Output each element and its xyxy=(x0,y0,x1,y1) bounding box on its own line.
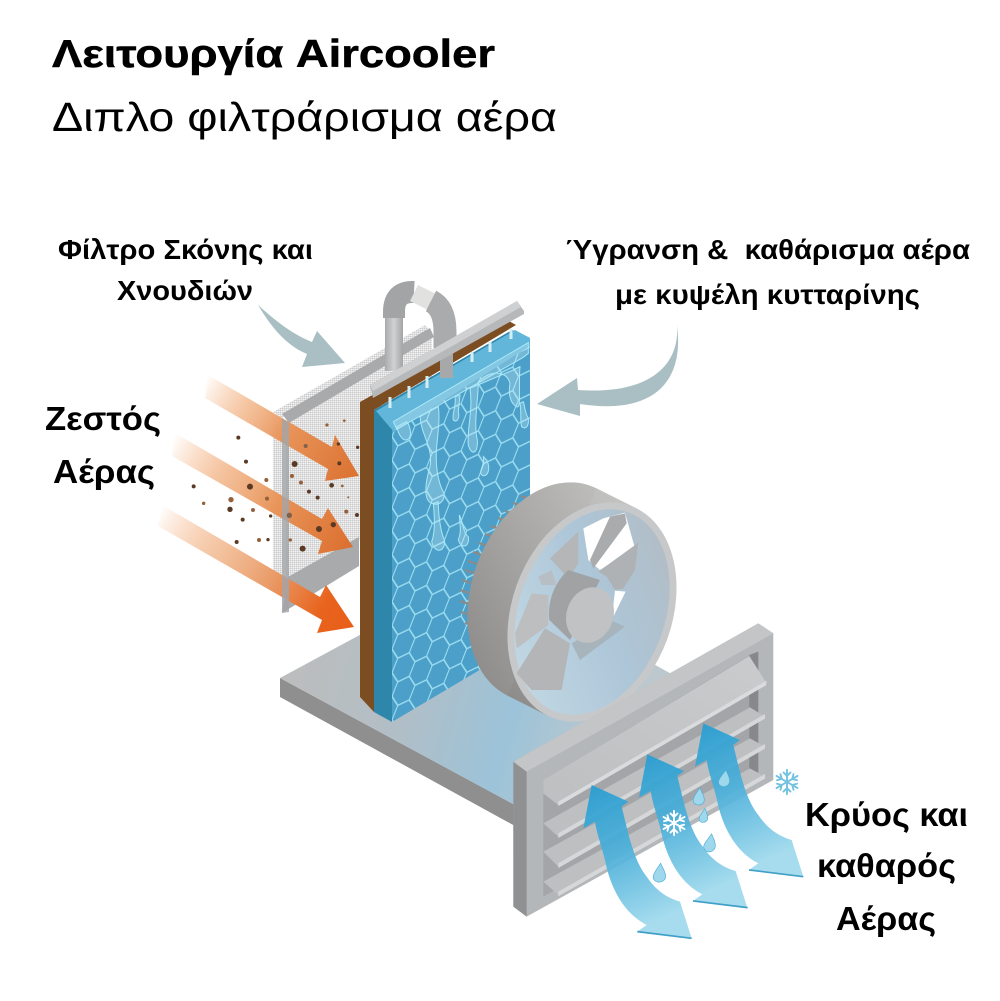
arrow C xyxy=(695,723,803,877)
water manifold with nozzles xyxy=(370,301,524,408)
arrow 2 xyxy=(172,433,353,554)
water pipe xyxy=(385,292,453,378)
cold air arrows xyxy=(583,723,803,938)
dust filter screen xyxy=(273,325,434,613)
label: dust filter: Χνουδιών xyxy=(117,275,253,306)
label: cold clean air: Κρύος και xyxy=(805,796,968,833)
fan inner xyxy=(487,487,697,737)
louvre grille xyxy=(513,623,773,917)
white gaps xyxy=(583,513,635,570)
pointer arrow to pad xyxy=(537,325,678,416)
arrow B xyxy=(639,754,747,908)
arrow 1 xyxy=(205,375,359,481)
label: humidification xyxy=(565,234,970,310)
label: dust filter xyxy=(58,234,313,306)
fan drum xyxy=(438,458,666,726)
base plate xyxy=(280,569,740,826)
snowflake icon white xyxy=(662,811,686,835)
label: cold clean air: καθαρός xyxy=(817,847,956,884)
fan hub xyxy=(549,570,600,640)
hot air arrows xyxy=(158,375,359,633)
label: humidification: Ύγρανση & καθάρισμα αέρα xyxy=(565,234,970,265)
slats xyxy=(543,656,767,805)
label: hot air: Αέρας xyxy=(53,453,155,490)
evaporative cooling pad xyxy=(360,320,530,722)
snowflake icon blue xyxy=(775,770,799,794)
label: hot air xyxy=(45,400,161,490)
fan xyxy=(438,458,706,746)
fan blades xyxy=(515,513,638,690)
label: hot air: Ζεστός xyxy=(45,400,161,437)
fan back fins xyxy=(460,496,530,626)
pointer arrow to filter xyxy=(258,305,345,367)
label: cold clean air xyxy=(805,796,968,937)
arrow A xyxy=(583,785,692,938)
label: humidification: με κυψέλη κυτταρίνης xyxy=(615,279,920,310)
fan rim xyxy=(478,478,706,746)
dust particles xyxy=(192,419,359,552)
label: dust filter: Φίλτρο Σκόνης και xyxy=(58,234,313,265)
filter front post xyxy=(282,418,289,613)
title: Λειτουργία Aircooler xyxy=(52,33,495,76)
water drips xyxy=(393,343,528,550)
subtitle: Διπλο φιλτράρισμα αέρα xyxy=(52,94,557,140)
water droplets xyxy=(653,770,730,882)
arrow 3 xyxy=(158,505,354,633)
label: cold clean air: Αέρας xyxy=(836,900,936,937)
